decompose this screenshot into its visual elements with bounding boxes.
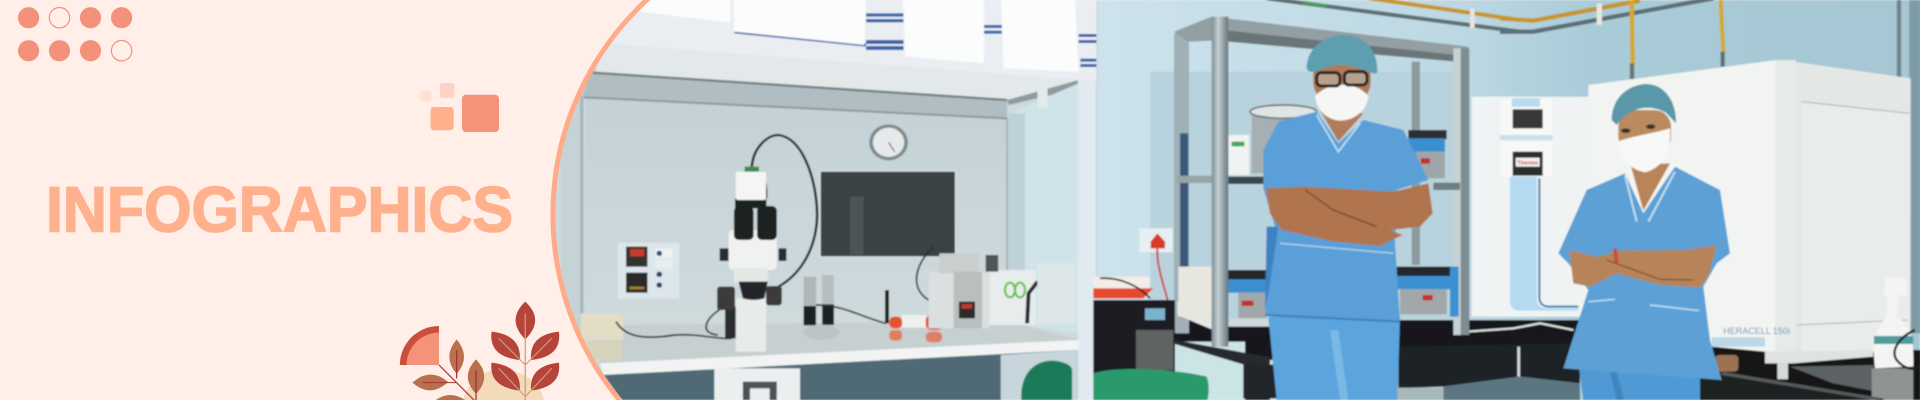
crossed arms [1569, 245, 1717, 287]
brown branch [412, 339, 484, 400]
silver cylinders [804, 275, 886, 340]
orange tube [885, 290, 943, 342]
title: INFOGRAPHICS [46, 174, 513, 246]
corner shading [1909, 0, 1920, 333]
under-bench box [714, 368, 800, 400]
red device and UPS [1093, 277, 1175, 373]
spray bottle [1874, 278, 1920, 369]
right counter [1700, 347, 1920, 400]
icon: stacked squares [420, 83, 499, 132]
surgical cap [1307, 35, 1377, 73]
trousers [1579, 368, 1700, 400]
woman [1558, 84, 1730, 400]
mask [1315, 85, 1368, 121]
power strip [580, 308, 732, 360]
face [1618, 110, 1671, 153]
incubator left body [1472, 97, 1525, 317]
scrub top [1263, 112, 1428, 322]
wall shadow behind rack [1150, 72, 1455, 320]
blue water baths [1178, 130, 1459, 327]
green cloth [1021, 361, 1072, 400]
Heracell label: HERACELL 150i [1723, 326, 1790, 336]
bottles and scissors [986, 255, 1075, 325]
left incubator [1487, 97, 1590, 317]
counter under rack [1175, 320, 1580, 400]
pressure gauge [869, 124, 908, 160]
microscope [717, 135, 817, 352]
papers [639, 0, 1079, 72]
incubators, pipes and woman [1487, 0, 1920, 400]
man [1263, 35, 1433, 400]
wall pipes [1267, 0, 1520, 32]
room equipment and man [1093, 0, 1580, 400]
quarter circle [400, 326, 439, 365]
glasses [1317, 72, 1367, 86]
pipes [1500, 0, 1899, 79]
stripes [734, 13, 1096, 67]
scrub top [1558, 167, 1730, 380]
control panel [618, 243, 679, 299]
decorative dot grid [18, 7, 132, 61]
red branch [491, 302, 559, 400]
illustration: quarter circle and leaves [400, 302, 559, 400]
mask [1617, 128, 1670, 172]
Thermo logo: Thermo [1517, 161, 1539, 167]
right incubator [1588, 60, 1911, 379]
steel pot [1227, 105, 1317, 175]
socket [1139, 228, 1173, 300]
surgical cap [1612, 84, 1676, 125]
laminar flow hood [550, 0, 1098, 400]
steel rack [1174, 17, 1469, 335]
neck [1631, 163, 1670, 211]
front left rack post [1212, 17, 1228, 347]
photo: lab with hood, shelving, staff and incubators [550, 0, 1920, 400]
dark screen [820, 171, 956, 257]
crossed arms [1266, 183, 1433, 246]
bench shelf [586, 322, 1079, 400]
water bath [917, 247, 989, 328]
trousers [1268, 317, 1400, 400]
curved orange border [553, 0, 650, 400]
room wall [1090, 0, 1920, 400]
face [1313, 57, 1371, 100]
green cloth [1093, 369, 1209, 400]
cream blob [463, 369, 544, 400]
left panel with curved border [0, 0, 650, 400]
neck [1320, 110, 1363, 142]
